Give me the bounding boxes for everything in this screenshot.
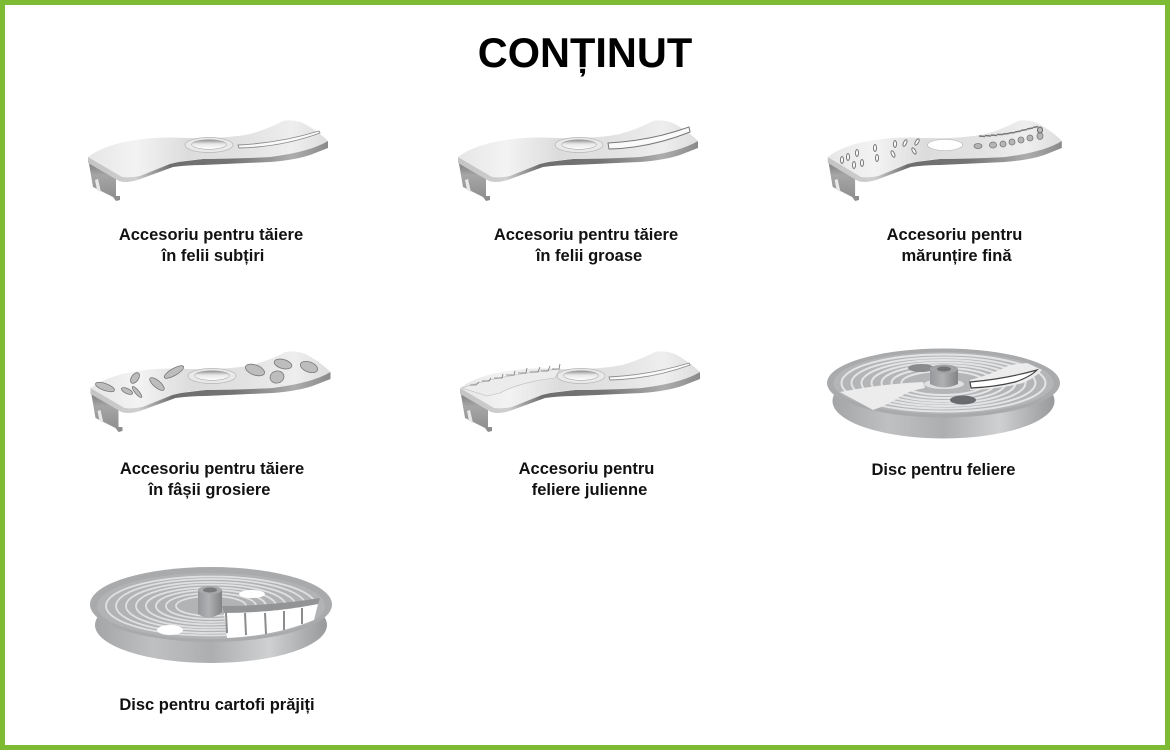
accessory: julienne blade: feliere julienne [532,481,647,499]
accessory: thick slicing blade: în felii groase [535,247,642,265]
slicing disc [827,348,1060,479]
accessory: thin slicing blade: în felii subțiri [161,247,264,265]
accessory: thin slicing blade [88,120,328,265]
accessory: fine shredding blade [828,120,1062,265]
accessory: julienne blade [460,351,700,499]
accessory: thick slicing blade: Accesoriu pentru tăiere [494,226,678,244]
accessory: thin slicing blade: Accesoriu pentru tăiere [119,226,303,244]
accessory: julienne blade: Accesoriu pentru [519,460,654,478]
title: CONȚINUT [478,29,692,76]
accessory: coarse shredding blade: în fâșii grosiere [148,481,270,499]
French fries disc: Disc pentru cartofi prăjiți [119,696,315,714]
accessory: thick slicing blade [458,120,698,265]
accessory: fine shredding blade: mărunțire fină [901,247,1012,265]
accessory: coarse shredding blade: Accesoriu pentru tăiere [120,460,304,478]
accessory: coarse shredding blade [90,351,330,499]
accessory: fine shredding blade: Accesoriu pentru [887,226,1022,244]
French fries disc [90,567,332,714]
slicing disc: Disc pentru feliere [872,461,1015,479]
